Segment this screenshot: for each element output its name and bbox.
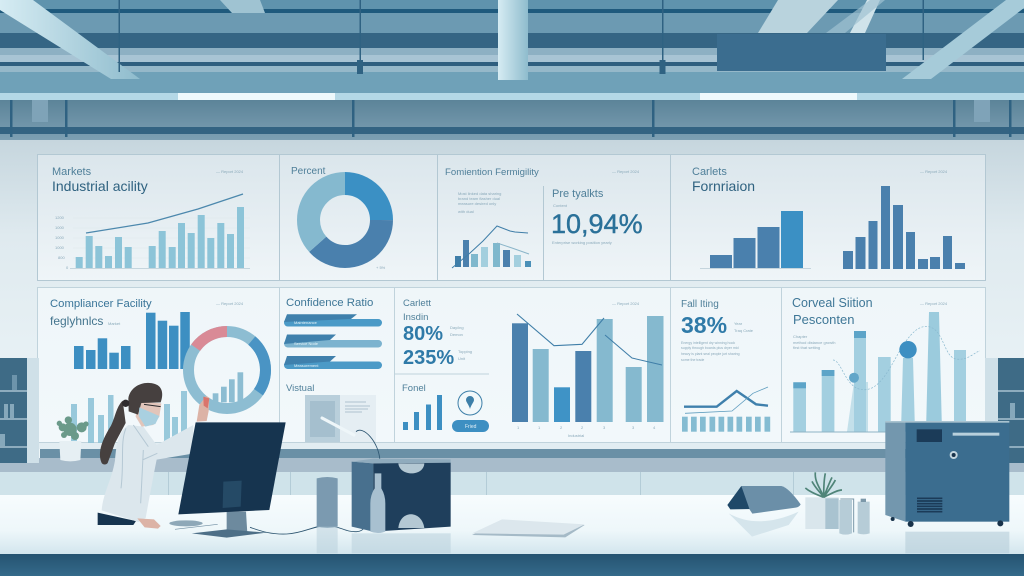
icon: potted plant [57,416,89,461]
panel: compliance facility: — Report 2024 [216,301,244,306]
panel: carlets formation charts: Carlets [692,166,727,178]
panel: pre analysis stat: Enterprise working position yearly [552,240,612,245]
panel: carlets formation charts [692,166,965,269]
bottle [370,473,385,533]
lab instrument machine [885,421,1009,553]
dashboard top row frame [38,154,986,280]
pill bars: Measurement [294,363,319,368]
axis labels: 1000 [55,245,65,250]
bars [512,316,664,422]
document thumbnail [305,395,376,442]
panel: multi series bar chart: 3 [603,425,606,430]
panel: percent donut [291,166,386,270]
panel: falling stat: Year [734,321,743,326]
line chart [684,391,768,407]
strip bars [682,417,770,432]
hanging rods [10,0,1012,137]
panel: confidence ratio: Confidence Ratio [286,297,373,309]
panel: funnel mini: Fonel [402,383,426,394]
panel: multi series bar chart: 1 [517,425,520,430]
button pill [452,420,489,432]
panel: falling stat: some the trade [681,358,704,362]
panel: formation fertility: measure desired only [458,201,496,206]
panel: multi series bar chart: 4 [653,425,656,430]
panel: markets industrial activity: Industrial acility [52,178,148,194]
tablet and tray [169,520,218,529]
donut chart [308,184,382,256]
panel: multi series bar chart [512,301,664,438]
background light bars [71,391,187,449]
panel: multi series bar chart: 2 [581,425,584,430]
dark storage box [352,459,451,553]
column chart with nodes [790,312,980,432]
axis labels: 1000 [55,235,65,240]
shelf unit: right [985,358,1024,463]
trend lines [517,314,604,346]
cylinder container [317,477,338,553]
panel: carlett insdin stats: Unit [458,356,466,361]
folded tablet stand [727,486,801,537]
panel: compliance facility [50,298,266,449]
panel: multi series bar chart: 1 [538,425,541,430]
panel: multi series bar chart: 2 [560,425,563,430]
hvac duct box [717,34,886,71]
panel: conveal station: method distance growth [793,340,835,345]
panel: carlets formation charts: Fornriaion [692,178,755,194]
ceiling [0,0,1024,140]
panel: carlett insdin stats: Demon [450,332,463,337]
axis labels: 1200 [55,215,65,220]
panel: compliance facility: Compliancer Facility [50,298,152,310]
panel: carlets formation charts: — Report 2024 [920,169,948,174]
trend line [86,194,243,233]
ledge below wall panels [0,443,1024,496]
axis labels: 1000 [55,225,65,230]
keyboard [472,519,585,537]
cable [250,430,380,534]
bar chart: small bars [74,312,190,369]
panel: falling stat: Traq Crate [734,328,754,333]
person: lab worker in mask [98,383,209,529]
stat 235 percent: 235% [403,347,454,369]
panel: falling stat: supply through boards plus dryer mid [681,346,739,350]
panel: conveal station: Corveal Siition [792,296,873,310]
panel: compliance facility: feglyhnlcs [50,314,103,328]
desk front edge [0,554,1024,576]
panel: formation fertility [445,167,640,268]
panel: funnel mini: Fried [465,424,477,430]
panel: formation fertility: Fomiention Fermigility [445,167,539,178]
panel: conveal station: — Report 2024 [920,301,948,306]
panel: percent donut: Percent [291,166,326,177]
stepped bar chart [700,211,811,269]
stat 80 percent: 80% [403,323,443,345]
panel: confidence ratio: Vistual [286,383,314,394]
panel: formation fertility: — Report 2024 [612,169,640,174]
axis labels: 800 [58,255,65,260]
ring chart with inset bars [188,332,266,408]
desk surface [0,495,1024,554]
icon: location pin [458,391,482,415]
panel: markets industrial activity [52,166,250,270]
panel: pre analysis stat [551,188,643,245]
pill bars: Service Node [294,341,319,346]
panel: formation fertility: brand team flasher dual [458,196,500,201]
panel: formation fertility: Most linked data sharing [458,191,501,196]
panel: conveal station: Chapter [793,334,808,339]
stat 38 percent: 38% [681,312,727,338]
panel: markets industrial activity: — Report 2024 [216,169,244,174]
axis labels: 0 [66,265,69,270]
panel: multi series bar chart: 3 [632,425,635,430]
panel: funnel mini [402,383,489,432]
panel: multi series bar chart: Industrial [568,433,584,438]
pill bars [284,314,382,369]
panel: falling stat: Energy intelligent dry winning hook [681,341,735,345]
panel: conveal station [790,296,980,432]
panel: falling stat [681,299,770,432]
panel: carlett insdin stats: Topping [458,349,472,354]
icon: desk plant in box [805,472,842,529]
monitor [178,422,286,538]
panel: confidence ratio [284,297,382,442]
panel: carlett insdin stats [403,298,472,369]
bar chart: industrial activity [70,207,250,268]
histogram chart [843,186,965,269]
panel: formation fertility: with dual [458,209,474,214]
panel: carlett insdin stats: Day/ing [450,325,464,330]
panel: carlett insdin stats: Insdin [403,312,428,323]
back wall [0,140,1024,460]
left desk scene [57,383,451,553]
shelf unit: left [0,358,39,463]
ceiling beams [0,0,1024,80]
panel: multi series bar chart: — Report 2024 [612,301,640,306]
panel: pre analysis stat: Pre tyalkts [552,188,604,200]
mini bar chart [403,395,442,430]
panel: compliance facility: Market [108,321,121,326]
panel: falling stat: heavy is plant seal people jurt sharing [681,352,740,356]
panel: pre analysis stat: Content [553,203,568,208]
right desk scene [472,421,1009,553]
panel: conveal station: first that setting [793,345,820,350]
dashboard bottom row frame [38,287,986,442]
panel: percent donut: + 5% [376,265,386,270]
metal canisters [839,499,870,535]
panel: conveal station: Pesconten [793,312,854,327]
panel: carlett insdin stats: Carlett [403,298,431,309]
pill bars: Maintenance [294,320,318,325]
stat number: 10,94% [551,209,643,239]
mixed chart [452,226,531,268]
heading: markets: Markets [52,166,92,178]
panel: falling stat: Fall Iting [681,299,719,310]
axis labels [55,215,69,270]
